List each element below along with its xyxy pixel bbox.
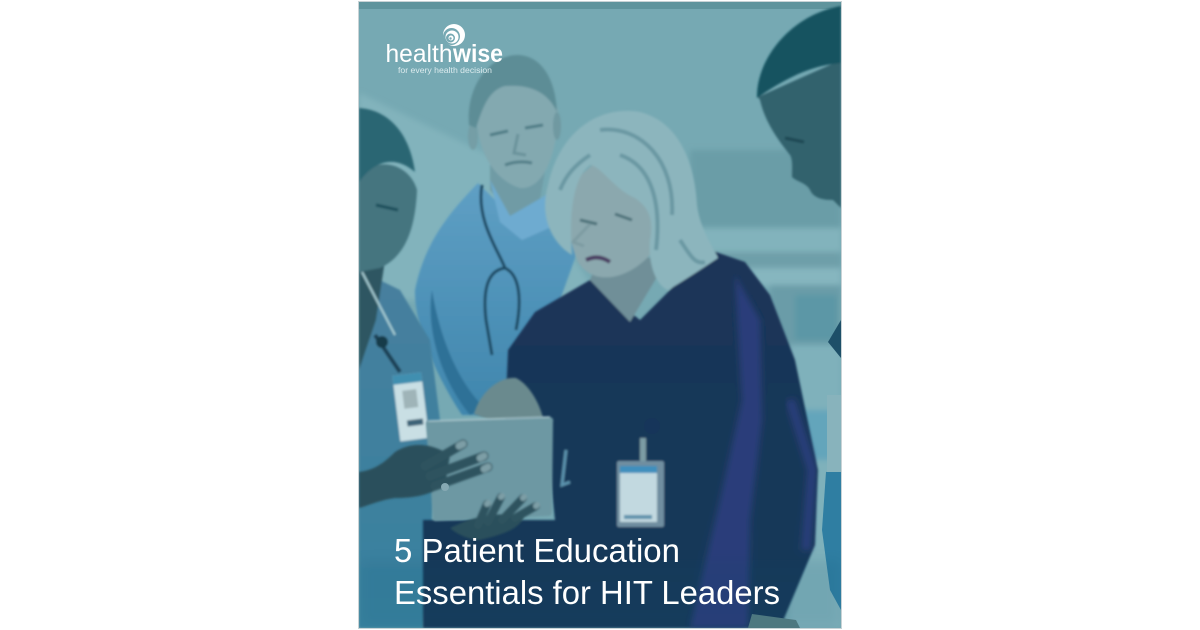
hair — [469, 55, 557, 128]
page frame — [358, 2, 842, 628]
sleeve fold — [790, 400, 812, 550]
scrubs — [359, 270, 440, 628]
ears — [468, 126, 478, 150]
nurse hands — [359, 444, 537, 540]
logo tagline: for every health decision — [398, 66, 492, 75]
neck — [490, 165, 546, 216]
ring — [441, 483, 449, 491]
shadow gradient near bottom — [359, 560, 841, 628]
upper hand — [359, 445, 450, 508]
lanyard reel — [644, 418, 660, 434]
cover page illustration — [358, 1, 842, 629]
title — [394, 532, 780, 611]
right corridor background — [690, 150, 841, 628]
far right coworker details — [822, 320, 841, 610]
logo wordmark — [386, 40, 503, 68]
person: woman at centre — [423, 111, 818, 628]
right sleeve highlight — [690, 275, 762, 628]
id badge — [392, 372, 429, 441]
ceiling band — [359, 2, 841, 9]
grey hair — [545, 111, 718, 290]
id badge — [617, 461, 664, 527]
photo — [359, 2, 841, 628]
person: nurse at left — [359, 108, 440, 628]
hand at bottom right — [748, 614, 800, 628]
logo swirl icon — [443, 24, 465, 46]
pointing hand — [474, 378, 543, 420]
background wall — [359, 2, 841, 628]
face — [359, 164, 417, 272]
tablet — [426, 417, 553, 521]
logo — [386, 24, 503, 75]
face — [758, 60, 841, 208]
eyes — [376, 205, 398, 210]
logo on shirt behind tablet — [562, 450, 570, 485]
head — [477, 84, 558, 188]
neck — [590, 255, 660, 322]
shirt — [415, 183, 578, 415]
dark blouse — [423, 250, 818, 628]
eyes and mouth — [490, 125, 543, 135]
stethoscope — [481, 185, 519, 355]
person: man with stethoscope — [415, 55, 578, 415]
diagonal left wall — [359, 93, 600, 300]
person: man at right head — [757, 6, 841, 208]
hair — [359, 108, 415, 182]
logo wordmark: wise — [452, 40, 503, 68]
face — [570, 166, 652, 278]
lanyard — [375, 335, 400, 372]
collar — [490, 182, 549, 240]
title line 1: 5 Patient Education — [394, 532, 680, 569]
logo wordmark: health — [386, 40, 452, 68]
eye — [785, 138, 804, 142]
lower hand — [450, 514, 525, 540]
title line 2: Essentials for HIT Leaders — [394, 574, 780, 611]
neck and chest — [359, 260, 385, 370]
hair — [757, 6, 841, 98]
